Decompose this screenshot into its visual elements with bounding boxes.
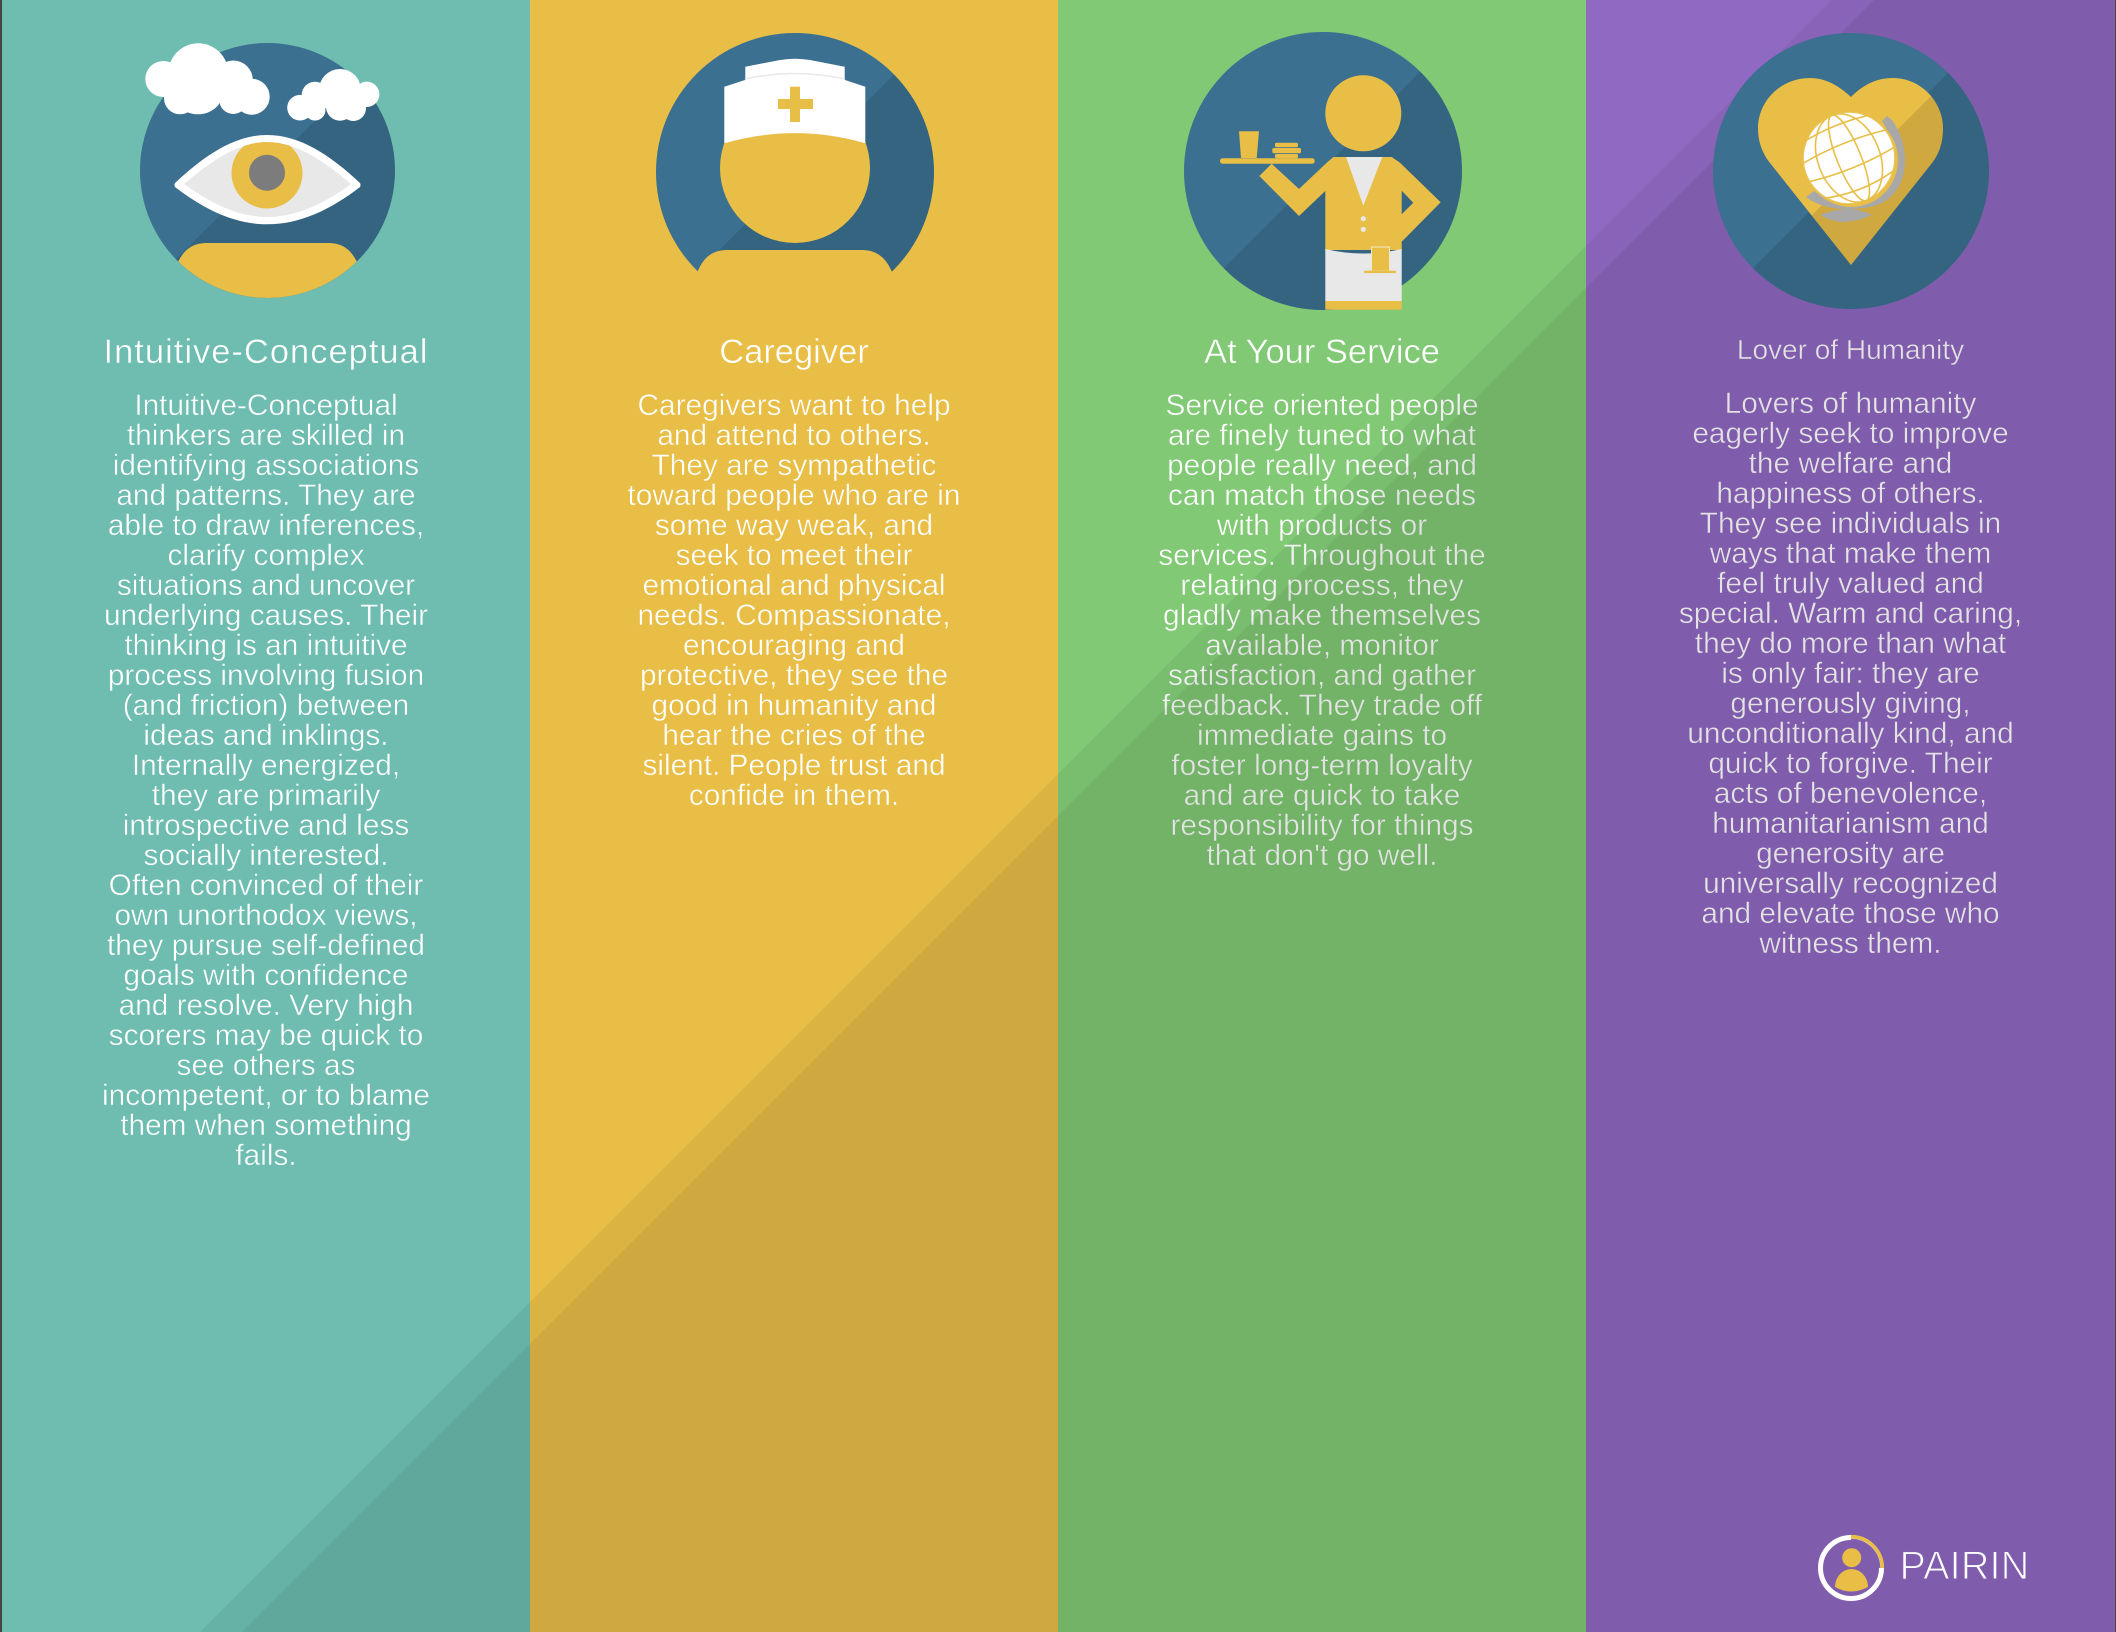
text block: lover of humanity description: and elevate those who: [1701, 897, 2000, 930]
text block: caregiver description: some way weak, and: [655, 509, 933, 542]
panel: at your service: [1058, 0, 1586, 1632]
text block: at your service description: with products or: [1217, 509, 1427, 542]
text block: intuitive-conceptual description: see others as: [177, 1049, 355, 1082]
text block: intuitive-conceptual description: and patterns. They are: [116, 479, 416, 512]
text block: lover of humanity description: witness them.: [1759, 927, 1942, 960]
text block: caregiver description: hear the cries of the: [662, 719, 926, 752]
text block: lover of humanity description: They see individuals in: [1700, 507, 2001, 540]
text block: at your service description: [1158, 389, 1486, 872]
icon: eye and clouds: [140, 43, 395, 298]
text block: intuitive-conceptual description: own unorthodox views,: [114, 899, 418, 932]
text block: lover of humanity description: ways that make them: [1710, 537, 1991, 570]
text block: intuitive-conceptual description: thinking is an intuitive: [124, 629, 408, 662]
text block: intuitive-conceptual description: scorers may be quick to: [109, 1019, 423, 1052]
icon: nurse: [656, 33, 934, 272]
heading: lover of humanity: Lover of Humanity: [1737, 334, 1964, 365]
panel: intuitive-conceptual: [2, 0, 530, 1632]
text block: lover of humanity description: special. Warm and caring,: [1679, 597, 2022, 630]
text block: intuitive-conceptual description: Intuitive-Conceptual: [134, 389, 398, 422]
text block: at your service description: people really need, and: [1167, 449, 1477, 482]
text block: caregiver description: Caregivers want to help: [637, 389, 951, 422]
text block: intuitive-conceptual description: fails.: [235, 1139, 297, 1172]
text block: caregiver description: and attend to others.: [657, 419, 931, 452]
text block: caregiver description: encouraging and: [683, 629, 905, 662]
text block: intuitive-conceptual description: Often convinced of their: [109, 869, 423, 902]
waiter jacket: [1259, 157, 1441, 250]
text block: lover of humanity description: generosity are: [1756, 837, 1945, 870]
text block: intuitive-conceptual description: identifying associations: [113, 449, 419, 482]
text block: intuitive-conceptual description: situations and uncover: [117, 569, 415, 602]
text block: lover of humanity description: eagerly seek to improve: [1692, 417, 2009, 450]
text block: intuitive-conceptual description: [102, 389, 430, 1172]
icon: small cloud: [287, 69, 379, 121]
text block: lover of humanity description: quick to forgive. Their: [1708, 747, 1993, 780]
logo ring: [1820, 1537, 1882, 1598]
globe stand: [1806, 116, 1905, 209]
text block: at your service description: Service oriented people: [1165, 389, 1479, 422]
text block: intuitive-conceptual description: thinkers are skilled in: [127, 419, 405, 452]
text block: intuitive-conceptual description: them when something: [120, 1109, 412, 1142]
heading: intuitive-conceptual: Intuitive-Conceptual: [104, 332, 428, 370]
text block: lover of humanity description: humanitarianism and: [1712, 807, 1989, 840]
text block: lover of humanity description: is only fair: they are: [1721, 657, 1980, 690]
text block: lover of humanity description: feel truly valued and: [1717, 567, 1984, 600]
waiter apron: [1325, 249, 1402, 301]
text block: caregiver description: toward people who are in: [628, 479, 960, 512]
text block: at your service description: foster long-term loyalty: [1171, 749, 1473, 782]
icon: nurse cap: [724, 59, 865, 143]
text block: lover of humanity description: Lovers of humanity: [1725, 387, 1976, 420]
text block: intuitive-conceptual description: goals with confidence: [124, 959, 408, 992]
text block: at your service description: relating process, they: [1180, 569, 1464, 602]
text block: lover of humanity description: [1679, 387, 2022, 960]
text block: at your service description: can match those needs: [1168, 479, 1476, 512]
panel: caregiver: [530, 0, 1058, 1632]
text block: lover of humanity description: acts of benevolence,: [1714, 777, 1987, 810]
text block: lover of humanity description: they do more than what: [1695, 627, 2006, 660]
text block: intuitive-conceptual description: clarify complex: [167, 539, 365, 572]
heading: at your service: At Your Service: [1204, 332, 1440, 370]
text block: at your service description: gladly make themselves: [1163, 599, 1481, 632]
text block: intuitive-conceptual description: Internally energized,: [132, 749, 400, 782]
text block: at your service description: immediate gains to: [1197, 719, 1447, 752]
text block: lover of humanity description: happiness of others.: [1716, 477, 1985, 510]
text block: at your service description: that don't go well.: [1206, 839, 1437, 872]
text block: intuitive-conceptual description: ideas and inklings.: [143, 719, 389, 752]
icon: waiter with tray: [1184, 32, 1462, 310]
logo: pairin: PAIRIN: [1900, 1544, 2029, 1588]
text block: intuitive-conceptual description: incompetent, or to blame: [102, 1079, 430, 1112]
tray with glass and stack: [1220, 131, 1315, 164]
logo: pairin: [1820, 1537, 2029, 1598]
icon: heart with globe: [1713, 33, 1989, 309]
text block: caregiver description: protective, they see the: [640, 659, 948, 692]
icon: large cloud: [145, 43, 270, 115]
text block: caregiver description: confide in them.: [689, 779, 899, 812]
text block: caregiver description: seek to meet their: [676, 539, 912, 572]
text block: at your service description: are finely tuned to what: [1168, 419, 1476, 452]
text block: intuitive-conceptual description: introspective and less: [123, 809, 409, 842]
text block: lover of humanity description: unconditionally kind, and: [1687, 717, 2014, 750]
heading: caregiver: Caregiver: [719, 332, 869, 370]
text block: at your service description: and are quick to take: [1184, 779, 1460, 812]
text block: at your service description: available, monitor: [1205, 629, 1439, 662]
text block: intuitive-conceptual description: they pursue self-defined: [107, 929, 425, 962]
text block: caregiver description: good in humanity and: [652, 689, 936, 722]
text block: intuitive-conceptual description: able to draw inferences,: [108, 509, 424, 542]
icon: eye: [174, 135, 360, 224]
panel: lover of humanity: [1586, 0, 2115, 1632]
text block: lover of humanity description: the welfare and: [1749, 447, 1952, 480]
text block: at your service description: services. Throughout the: [1158, 539, 1486, 572]
text block: intuitive-conceptual description: socially interested.: [143, 839, 389, 872]
text block: lover of humanity description: universally recognized: [1703, 867, 1998, 900]
text block: caregiver description: emotional and physical: [642, 569, 946, 602]
text block: caregiver description: silent. People trust and: [642, 749, 946, 782]
text block: intuitive-conceptual description: (and friction) between: [123, 689, 409, 722]
text block: at your service description: feedback. They trade off: [1162, 689, 1482, 722]
text block: caregiver description: [628, 389, 960, 812]
globe: [1803, 112, 1898, 207]
text block: intuitive-conceptual description: they are primarily: [152, 779, 380, 812]
text block: at your service description: satisfaction, and gather: [1168, 659, 1476, 692]
text block: intuitive-conceptual description: underlying causes. Their: [104, 599, 428, 632]
text block: intuitive-conceptual description: process involving fusion: [108, 659, 424, 692]
text block: caregiver description: They are sympathetic: [652, 449, 936, 482]
text block: intuitive-conceptual description: and resolve. Very high: [119, 989, 413, 1022]
text block: lover of humanity description: generously giving,: [1730, 687, 1971, 720]
text block: caregiver description: needs. Compassionate,: [637, 599, 951, 632]
text block: at your service description: responsibility for things: [1170, 809, 1474, 842]
